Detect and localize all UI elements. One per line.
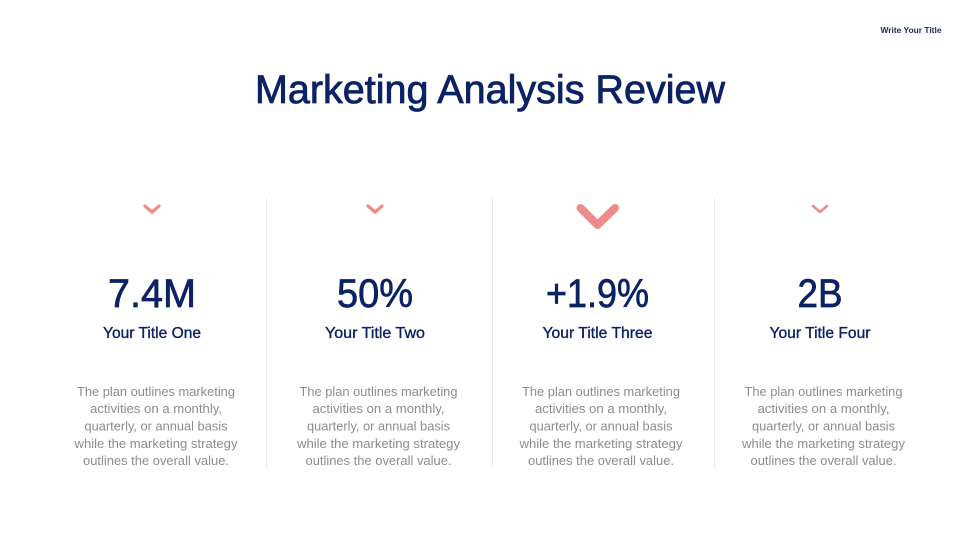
description: quarterly, or annual basis [307,418,450,434]
description [519,384,683,468]
icon: large chevron [580,208,615,225]
subtitle: Your Title Four [770,325,870,342]
icon: small chevron [368,206,382,212]
description: The plan outlines marketing [522,384,680,399]
description: quarterly, or annual basis [752,418,895,434]
description: outlines the overall value. [750,453,896,468]
description [296,384,460,468]
description: activities on a monthly, [312,401,444,416]
description: outlines the overall value. [528,453,674,468]
description: while the marketing strategy [741,436,905,451]
subtitle: Your Title Two [325,325,425,342]
panel: column two [296,206,460,468]
corner label: Write Your Title [880,25,942,35]
description: while the marketing strategy [296,436,460,451]
description [74,384,238,468]
description: while the marketing strategy [519,436,683,451]
metric: 7.4M: 7.4M [108,272,196,316]
panel: column three [519,208,683,468]
title: Marketing Analysis Review [255,68,725,112]
description: The plan outlines marketing [744,384,902,399]
panel: column one [74,206,238,468]
icon: small chevron [145,206,159,212]
description [741,384,905,468]
subtitle: Your Title Three [542,325,652,342]
description: while the marketing strategy [74,436,238,451]
description: The plan outlines marketing [300,384,458,399]
subtitle: Your Title One [103,325,201,342]
metric: 2B: 2B [798,272,842,316]
metric: +1.9%: +1.9% [546,272,649,316]
description: activities on a monthly, [758,401,890,416]
description: outlines the overall value. [83,453,229,468]
description: activities on a monthly, [535,401,667,416]
icon: small chevron [813,206,827,212]
metric: 50%: 50% [337,272,413,316]
description: quarterly, or annual basis [84,418,228,434]
description: outlines the overall value. [306,453,452,468]
description: activities on a monthly, [90,401,222,416]
description: quarterly, or annual basis [530,418,673,434]
panel: column four [741,206,905,468]
description: The plan outlines marketing [77,384,235,399]
